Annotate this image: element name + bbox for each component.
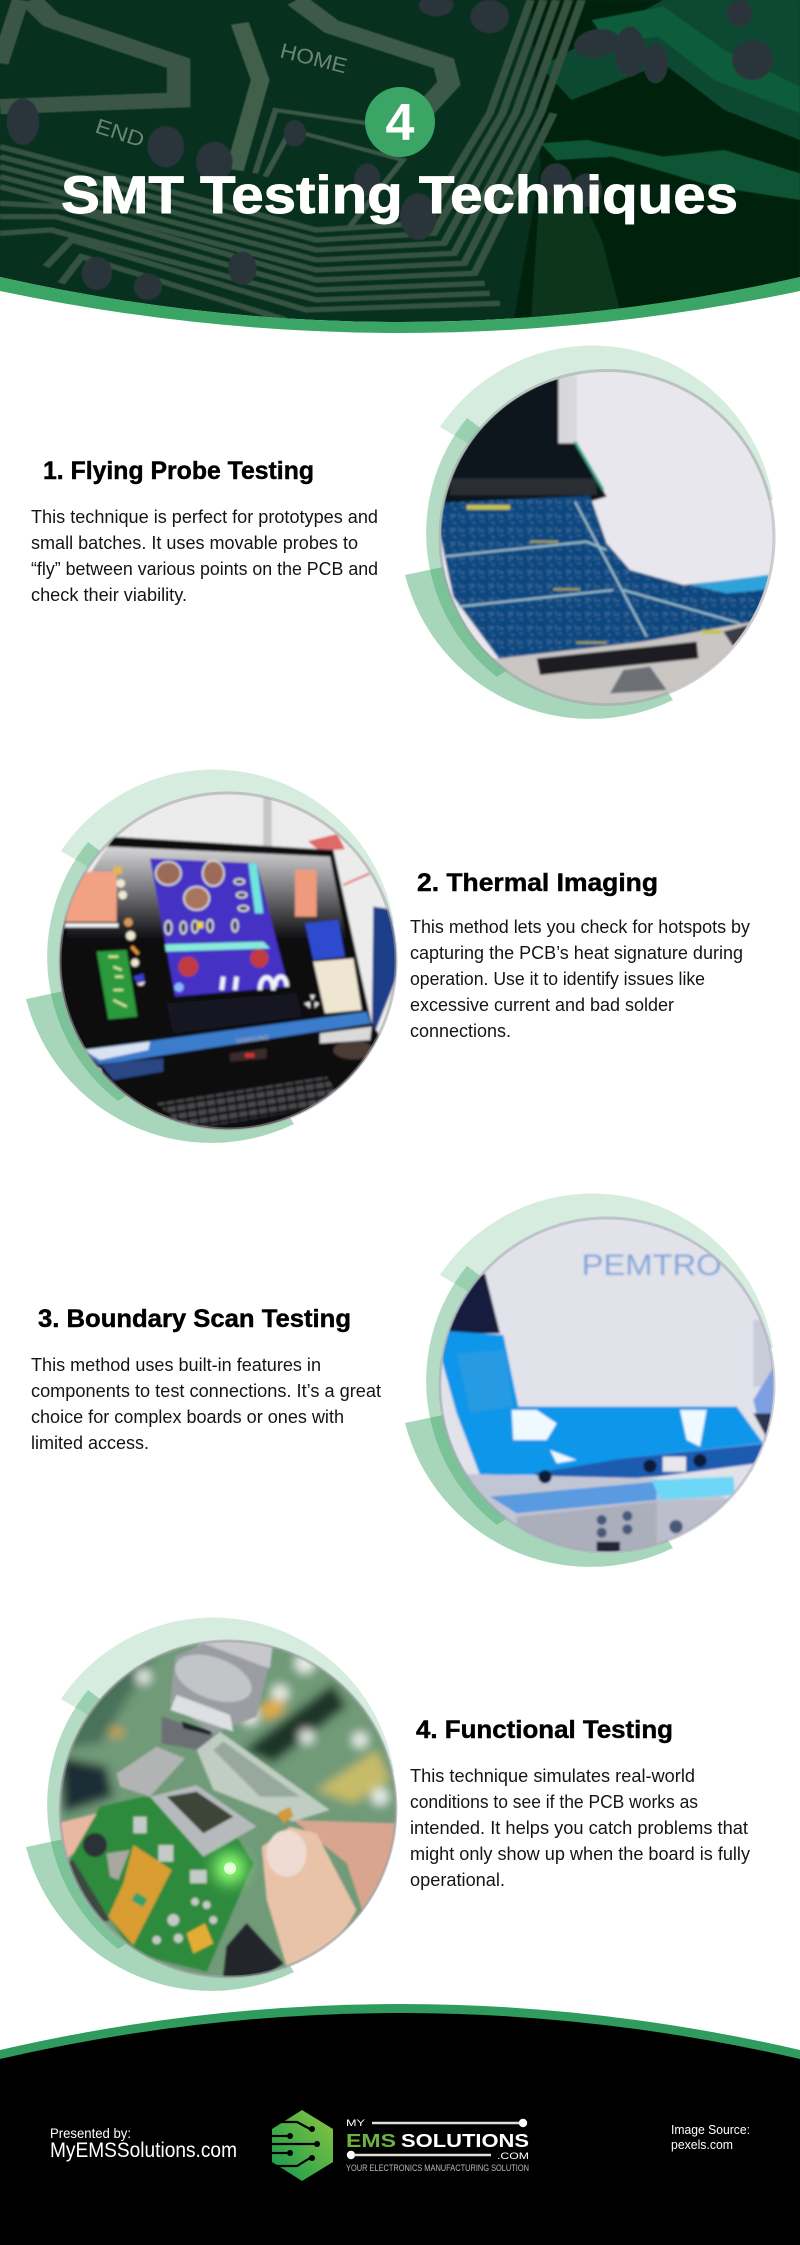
body 2: connections. bbox=[410, 1021, 511, 1041]
photo rim 3 bbox=[440, 1218, 774, 1552]
footer bbox=[0, 2004, 800, 2245]
presented by: Presented by: bbox=[50, 2125, 131, 2141]
heading 4: 4. Functional Testing bbox=[416, 1716, 673, 1744]
heading 3: 3. Boundary Scan Testing bbox=[38, 1305, 351, 1333]
body 4: might only show up when the board is fully bbox=[410, 1844, 750, 1864]
section 1: circular photo with arcs bbox=[405, 346, 780, 719]
presented by bbox=[50, 2125, 237, 2162]
heading 1: 1. Flying Probe Testing bbox=[43, 457, 314, 485]
body 3: limited access. bbox=[31, 1433, 149, 1453]
header bbox=[0, 0, 800, 333]
body 4: operational. bbox=[410, 1870, 505, 1890]
section 3: circular photo with arcs bbox=[405, 1194, 780, 1567]
header green curved band bbox=[0, 277, 800, 333]
logo wordmark: .COM bbox=[497, 2151, 529, 2162]
logo wordmark: MY bbox=[346, 2118, 366, 2129]
header circuit board photo: END bbox=[92, 115, 147, 152]
section 4: circular photo with arcs bbox=[26, 1618, 403, 1991]
header circuit board photo: HOME bbox=[278, 40, 349, 78]
body 2: operation. Use it to identify issues like bbox=[410, 969, 705, 989]
body 4: conditions to see if the PCB works as bbox=[410, 1792, 698, 1812]
section 2: circular photo with arcs bbox=[26, 770, 403, 1143]
body 1: This technique is perfect for prototypes and bbox=[31, 507, 378, 527]
body 1: small batches. It uses movable probes to bbox=[31, 533, 358, 553]
logo bbox=[272, 2110, 529, 2181]
section 1: flying probe testing text bbox=[31, 457, 378, 605]
photo: machine over glowing blue boards bbox=[433, 1213, 780, 1560]
decorative arcs 2 bbox=[26, 770, 394, 1143]
logo hexagon icon bbox=[272, 2110, 333, 2181]
number badge bbox=[365, 87, 435, 157]
logo wordmark bbox=[346, 2118, 529, 2173]
photo rim 4 bbox=[60, 1641, 396, 1977]
section 4: functional testing text bbox=[410, 1716, 750, 1890]
logo wordmark: EMS bbox=[346, 2130, 396, 2151]
heading 2: 2. Thermal Imaging bbox=[417, 869, 658, 897]
image source: pexels.com bbox=[671, 2137, 733, 2152]
logo wordmark: YOUR ELECTRONICS MANUFACTURING SOLUTION bbox=[346, 2163, 529, 2173]
body 4: This technique simulates real-world bbox=[410, 1766, 695, 1786]
header circuit board photo bbox=[0, 0, 800, 322]
body 2: capturing the PCB’s heat signature during bbox=[410, 943, 743, 963]
photo: fingers holding test connector on PCB bbox=[57, 1637, 403, 1983]
body 3 bbox=[31, 1355, 381, 1453]
photo rim 1 bbox=[440, 370, 774, 704]
footer black background bbox=[0, 2013, 800, 2245]
decorative arcs 3 bbox=[405, 1194, 773, 1567]
body 3: components to test connections. It’s a great bbox=[31, 1381, 381, 1401]
body 4: intended. It helps you catch problems that bbox=[410, 1818, 748, 1838]
body 2 bbox=[410, 917, 750, 1041]
body 4 bbox=[410, 1766, 750, 1890]
title: SMT Testing Techniques bbox=[61, 166, 738, 225]
decorative arcs 1 bbox=[405, 346, 773, 719]
logo wordmark: SOLUTIONS bbox=[401, 2130, 529, 2151]
decorative arcs 4 bbox=[26, 1618, 394, 1991]
photo: monitor showing thermal image: SAMSUNG bbox=[235, 1034, 270, 1045]
body 2: excessive current and bad solder bbox=[410, 995, 674, 1015]
photo: probe machine over blue PCB bbox=[433, 363, 780, 710]
body 1: “fly” between various points on the PCB and bbox=[31, 559, 378, 579]
body 1 bbox=[31, 507, 378, 605]
photo: machine over glowing blue boards: PEMTRO bbox=[582, 1249, 722, 1282]
section 2: thermal imaging text bbox=[410, 869, 750, 1041]
body 2: This method lets you check for hotspots by bbox=[410, 917, 750, 937]
image source: Image Source: bbox=[671, 2122, 750, 2137]
photo: monitor showing thermal image bbox=[57, 790, 403, 1140]
body 3: This method uses built-in features in bbox=[31, 1355, 321, 1375]
presented by: MyEMSSolutions.com bbox=[50, 2139, 237, 2162]
section 3: boundary scan testing text bbox=[31, 1305, 381, 1453]
footer green curved band bbox=[0, 2004, 800, 2075]
number badge: 4 bbox=[386, 94, 415, 152]
image source bbox=[671, 2122, 750, 2152]
photo rim 2 bbox=[60, 793, 396, 1129]
body 1: check their viability. bbox=[31, 585, 187, 605]
body 3: choice for complex boards or ones with bbox=[31, 1407, 344, 1427]
